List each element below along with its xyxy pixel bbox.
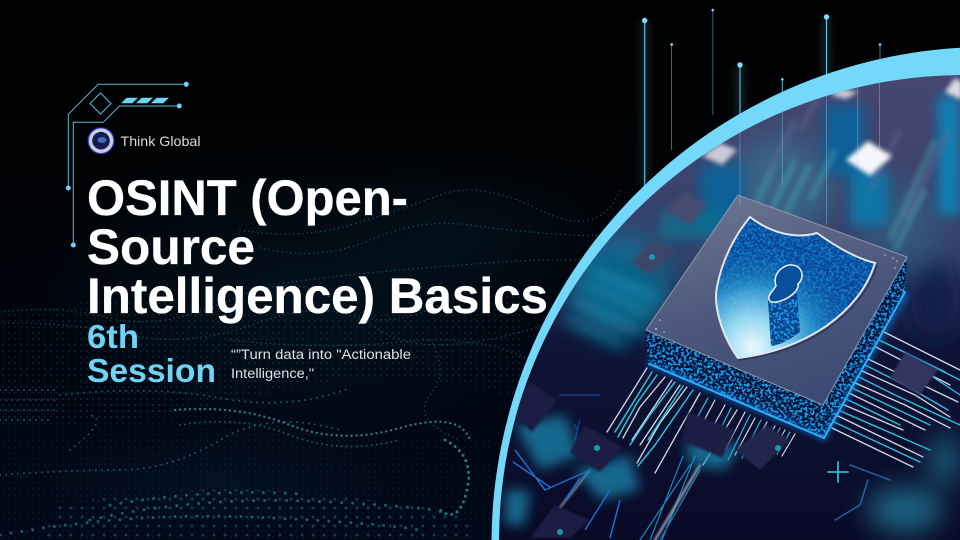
lower chips with teal glow [505,352,959,538]
keyhole opening [769,265,802,302]
brand name: Think Global [120,133,200,149]
chip corner sparkles [655,254,898,333]
small slate chips [630,192,707,275]
chip: glowing base edge [649,292,906,438]
ring: light blue arc [492,48,960,540]
faded pin lines inside photo [740,80,880,225]
title: Intelligence) Basics [87,268,548,324]
bracket decoration with diamond and bars [66,82,189,248]
session label [87,318,216,389]
shield with keyhole [712,214,878,360]
title [87,170,548,324]
blurred upper circuit area [565,95,960,352]
quote: Intelligence," [231,366,314,381]
quote: “”Turn data into "Actionable [231,347,411,362]
quote [231,347,411,381]
circuit traces right of chip [828,330,960,520]
session label: Session [87,352,216,389]
photo: circuit board with shield chip [499,75,960,540]
keyhole column [768,290,800,346]
logo: Think Global seal [88,127,114,154]
title: Source [87,219,255,275]
lines with dots: data pins above the ring [642,9,881,190]
circuit traces left of chip [558,368,795,540]
blurred white chip tops [702,78,960,176]
title: OSINT (Open- [87,170,408,226]
chip: top face [646,195,907,405]
chip: side walls [646,257,907,437]
session label: 6th [87,318,139,355]
